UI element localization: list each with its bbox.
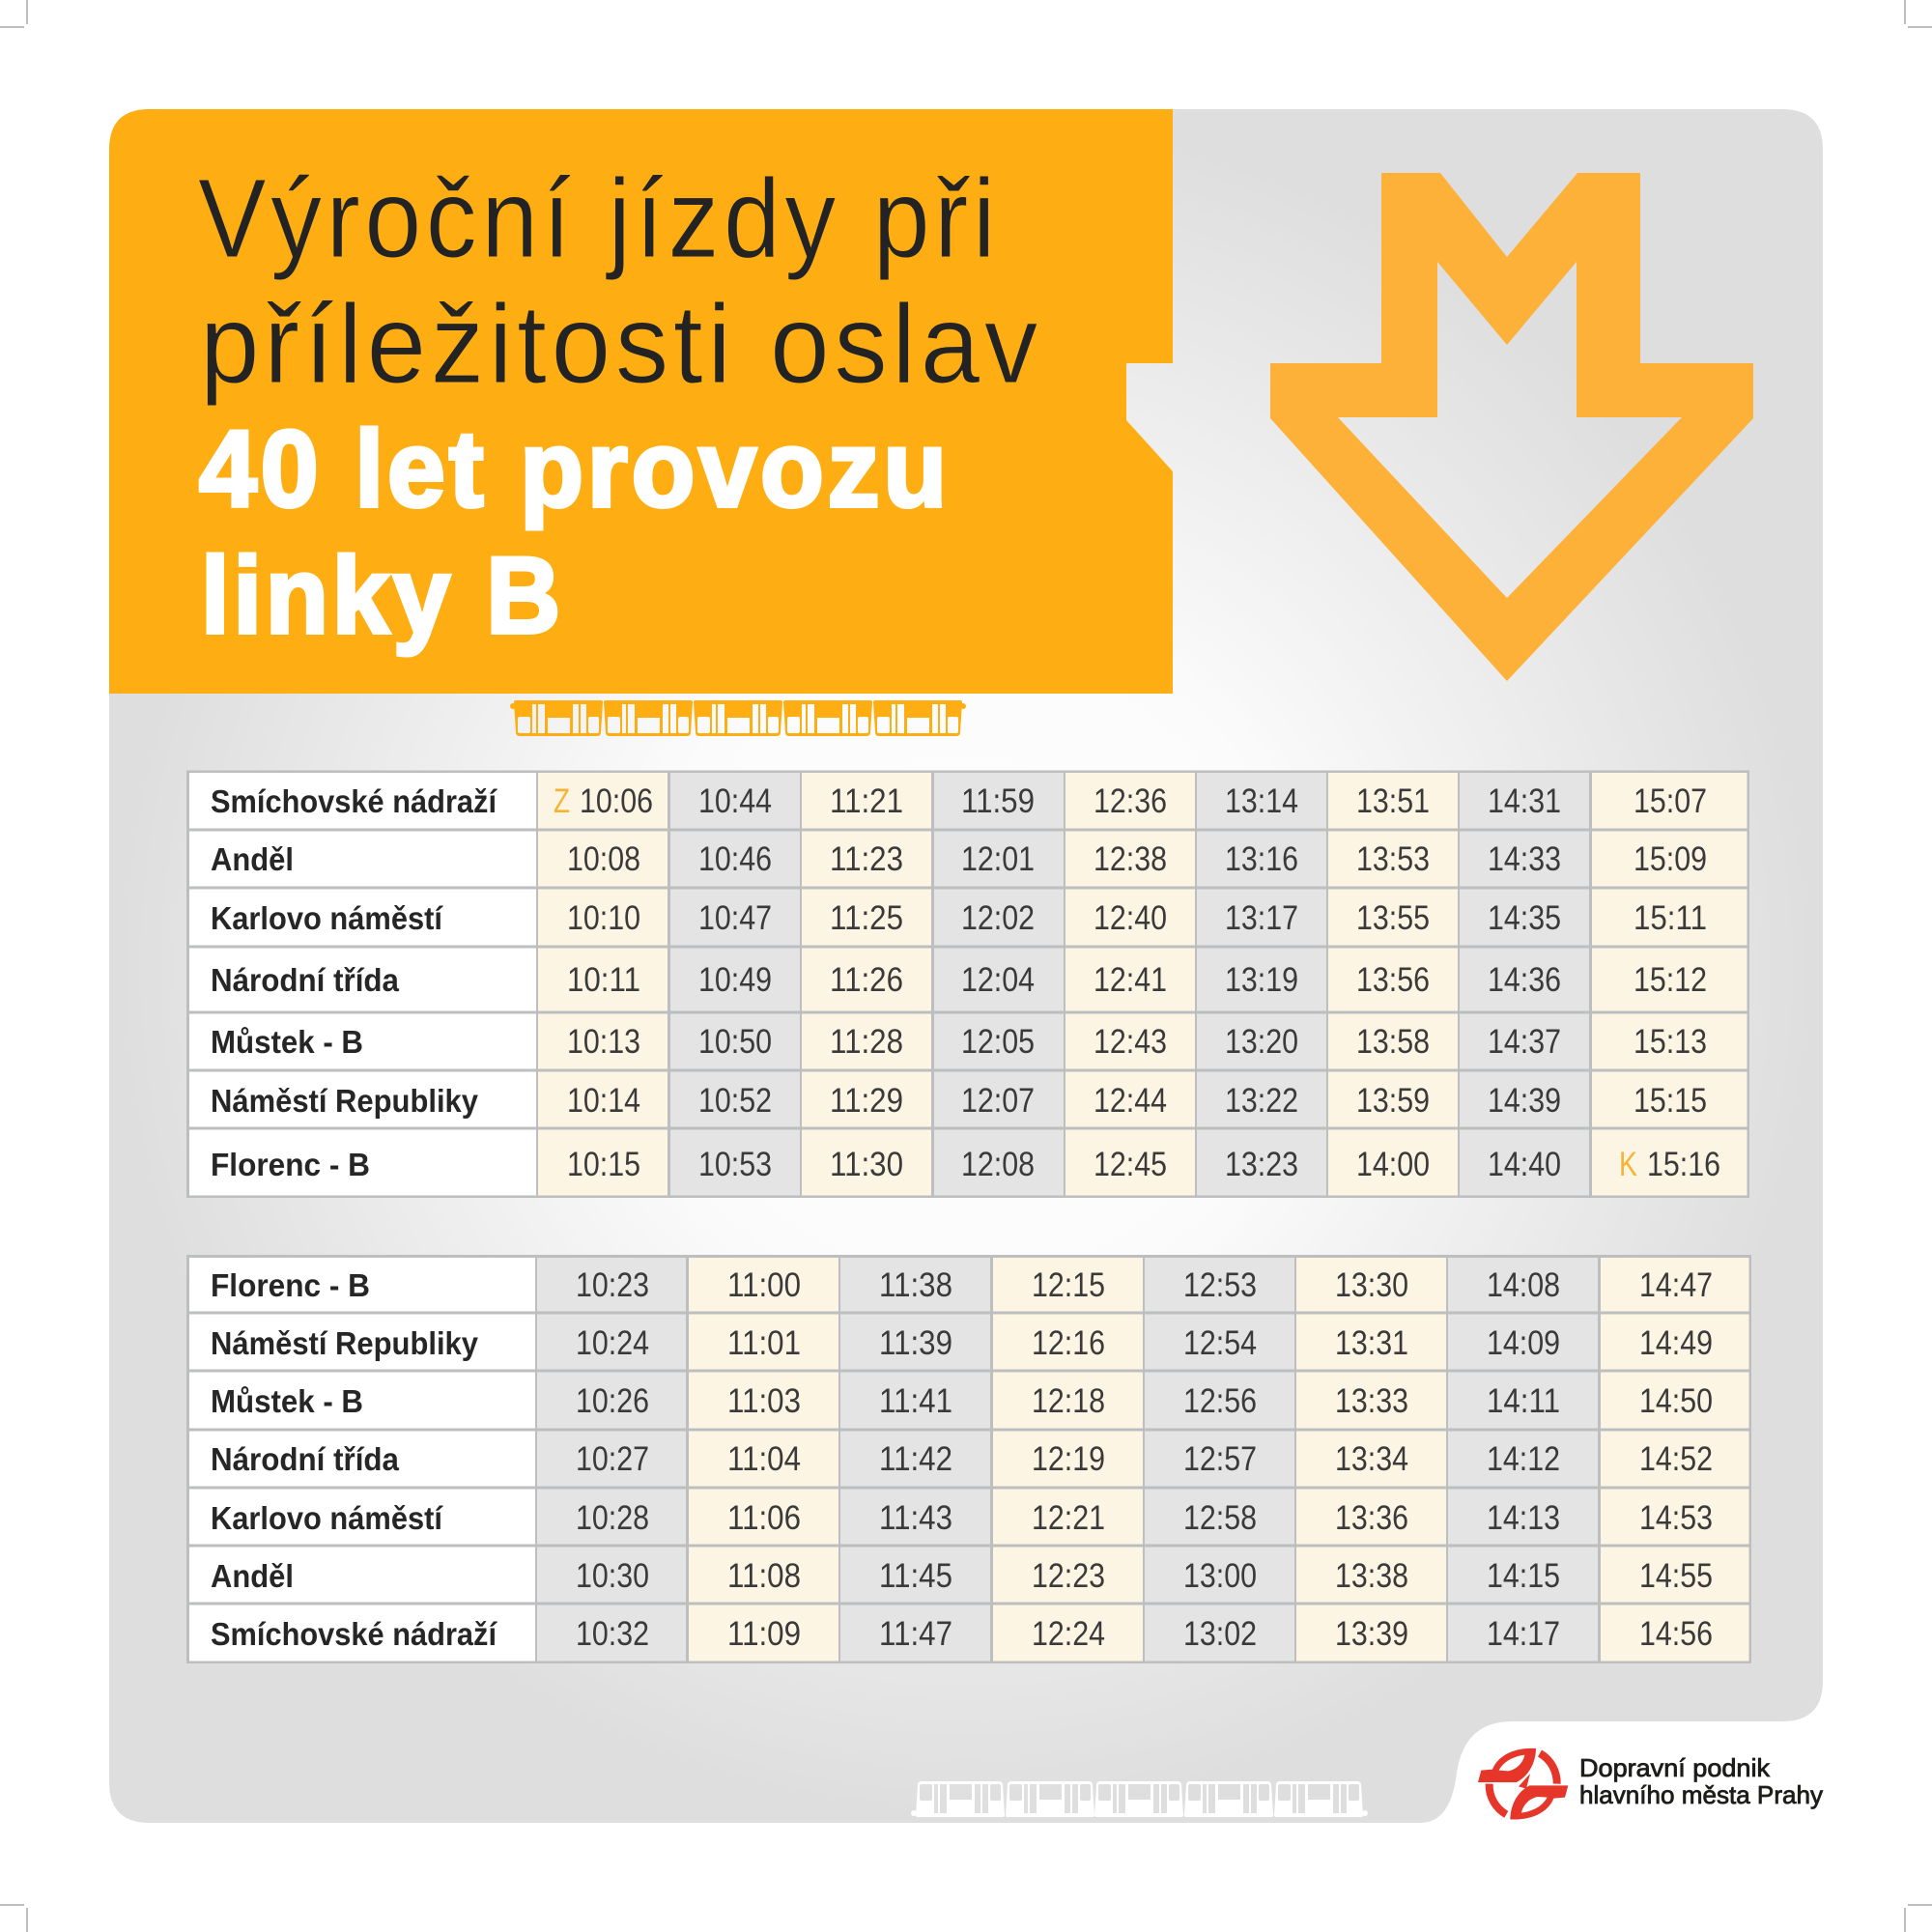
row: Národní třída [211, 961, 1707, 999]
row: Anděl: 11:45 [879, 1557, 952, 1595]
text: DPP company name [1579, 1753, 1823, 1809]
row: Florenc - B: 12:08 [961, 1146, 1035, 1183]
row: Náměstí Republiky [211, 1324, 1713, 1362]
icon: orange train [510, 700, 966, 736]
title: linky B [201, 535, 564, 656]
row: Můstek - B [211, 1382, 1713, 1420]
row: Můstek - B: 12:56 [1183, 1382, 1257, 1420]
row: Anděl [211, 1557, 1713, 1595]
row: Florenc - B: 14:40 [1488, 1146, 1561, 1183]
row: Smíchovské nádraží: 11:21 [830, 782, 903, 820]
row: Náměstí Republiky [211, 1082, 1707, 1120]
title: Výroční jízdy při [198, 156, 1000, 281]
row: Můstek - B: Můstek - B [211, 1383, 363, 1419]
panel: grey background [109, 109, 1823, 1823]
icon: metro M arrow logo [1270, 173, 1753, 681]
row: Florenc - B: 13:30 [1335, 1266, 1408, 1304]
row: Národní třída [211, 1440, 1713, 1478]
row: Můstek - B: 13:33 [1335, 1382, 1408, 1420]
row: Můstek - B: 10:26 [576, 1382, 649, 1420]
row: Karlovo náměstí: 12:40 [1094, 899, 1167, 937]
row: Můstek - B: 12:05 [961, 1023, 1035, 1061]
row: Karlovo náměstí: 15:11 [1634, 899, 1707, 937]
row: Národní třída: 14:52 [1639, 1440, 1713, 1478]
row: Náměstí Republiky: 13:31 [1335, 1324, 1408, 1362]
row: Smíchovské nádraží: 10:06 [580, 782, 653, 820]
row: Národní třída: Národní třída [211, 962, 400, 998]
row: Anděl: 10:30 [576, 1557, 649, 1595]
row: Karlovo náměstí: 14:35 [1488, 899, 1561, 937]
row: Náměstí Republiky: 15:15 [1634, 1082, 1707, 1120]
title: 40 let provozu [199, 409, 951, 529]
row: Karlovo náměstí: 11:06 [727, 1499, 801, 1537]
row: Florenc - B: 11:30 [830, 1146, 903, 1183]
row: Anděl: 13:53 [1356, 840, 1430, 878]
row: Florenc - B: 10:23 [576, 1266, 649, 1304]
row: Národní třída: 11:42 [879, 1440, 952, 1478]
row: Národní třída: 12:57 [1183, 1440, 1257, 1478]
row: Národní třída: 13:34 [1335, 1440, 1408, 1478]
row: Smíchovské nádraží: 13:39 [1335, 1615, 1408, 1653]
table: return timetable [186, 1255, 1751, 1663]
row: Můstek - B: 13:20 [1225, 1023, 1298, 1061]
row: Anděl: 14:15 [1487, 1557, 1560, 1595]
row: Anděl: 15:09 [1634, 840, 1707, 878]
row: Karlovo náměstí: 13:17 [1225, 899, 1298, 937]
row: Florenc - B: 14:47 [1639, 1266, 1713, 1304]
row: Náměstí Republiky: Náměstí Republiky [211, 1325, 479, 1361]
row: Florenc - B: 12:45 [1094, 1146, 1167, 1183]
row: Karlovo náměstí: 14:53 [1639, 1499, 1713, 1537]
row: Můstek - B: 14:11 [1487, 1382, 1560, 1420]
row: Karlovo náměstí: 11:25 [830, 899, 903, 937]
row: Florenc - B: 14:00 [1356, 1146, 1430, 1183]
row: Karlovo náměstí: 10:28 [576, 1499, 649, 1537]
row: Náměstí Republiky: 10:14 [567, 1082, 640, 1120]
row: Smíchovské nádraží: 13:02 [1183, 1615, 1257, 1653]
row: Florenc - B [211, 1266, 1713, 1304]
row: Anděl: Anděl [211, 1558, 294, 1594]
row: Smíchovské nádraží: 14:17 [1487, 1615, 1560, 1653]
row: Můstek - B: Můstek - B [211, 1024, 363, 1060]
row: Smíchovské nádraží [211, 1615, 1713, 1653]
row: Náměstí Republiky: 11:39 [879, 1324, 952, 1362]
row: Karlovo náměstí: 10:10 [567, 899, 640, 937]
row: Náměstí Republiky: 11:29 [830, 1082, 903, 1120]
row: Můstek - B: 11:28 [830, 1023, 903, 1061]
row: Florenc - B: 15:16 [1647, 1146, 1720, 1183]
row: Smíchovské nádraží: Smíchovské nádraží [211, 1616, 498, 1652]
row: Smíchovské nádraží: 14:56 [1639, 1615, 1713, 1653]
row: Smíchovské nádraží: 13:51 [1356, 782, 1430, 820]
row: Můstek - B: 10:50 [698, 1023, 772, 1061]
row: Florenc - B: 11:38 [879, 1266, 952, 1304]
row: Národní třída: 11:04 [727, 1440, 801, 1478]
row: Národní třída: 13:56 [1356, 961, 1430, 999]
row: Smíchovské nádraží: 11:47 [879, 1615, 952, 1653]
row: Anděl: 13:16 [1225, 840, 1298, 878]
row: Anděl: 10:08 [567, 840, 640, 878]
row: Anděl: 12:38 [1094, 840, 1167, 878]
row: Anděl: 13:00 [1183, 1557, 1257, 1595]
row: Náměstí Republiky: 12:07 [961, 1082, 1035, 1120]
row: Smíchovské nádraží [211, 782, 1707, 820]
row: Náměstí Republiky: 14:09 [1487, 1324, 1560, 1362]
row: Smíchovské nádraží: Z [554, 782, 570, 820]
row: Florenc - B: Florenc - B [211, 1147, 370, 1182]
row: Anděl: 14:33 [1488, 840, 1561, 878]
row: Náměstí Republiky: 13:22 [1225, 1082, 1298, 1120]
row: Anděl: 11:23 [830, 840, 903, 878]
row: Karlovo náměstí: 12:21 [1032, 1499, 1105, 1537]
row: Náměstí Republiky: 14:49 [1639, 1324, 1713, 1362]
row: Národní třída: 12:04 [961, 961, 1035, 999]
row: Národní třída: 13:19 [1225, 961, 1298, 999]
row: Anděl: 11:08 [727, 1557, 801, 1595]
row: Karlovo náměstí: 10:47 [698, 899, 772, 937]
row: Náměstí Republiky: 10:24 [576, 1324, 649, 1362]
row: Náměstí Republiky: 10:52 [698, 1082, 772, 1120]
row: Můstek - B [211, 1023, 1707, 1061]
row: Smíchovské nádraží: 13:14 [1225, 782, 1298, 820]
row: Národní třída: 11:26 [830, 961, 903, 999]
row: Karlovo náměstí: Karlovo náměstí [211, 1500, 444, 1536]
row: Náměstí Republiky: 12:54 [1183, 1324, 1257, 1362]
row: Smíchovské nádraží: 11:09 [727, 1615, 801, 1653]
icon: white train [911, 1781, 1368, 1817]
row: Florenc - B: 12:15 [1032, 1266, 1105, 1304]
icon: DPP red logo [1478, 1748, 1568, 1820]
row: Náměstí Republiky: Náměstí Republiky [211, 1083, 479, 1119]
row: Smíchovské nádraží: 12:36 [1094, 782, 1167, 820]
title [198, 156, 1042, 656]
text: DPP company name: Dopravní podnik [1579, 1753, 1771, 1782]
row: Anděl: 13:38 [1335, 1557, 1408, 1595]
text: DPP company name: hlavního města Prahy [1579, 1780, 1823, 1809]
row: Karlovo náměstí: Karlovo náměstí [211, 900, 444, 936]
row: Karlovo náměstí [211, 899, 1707, 937]
row: Národní třída: 10:49 [698, 961, 772, 999]
row: Můstek - B: 10:13 [567, 1023, 640, 1061]
row: Florenc - B: 10:53 [698, 1146, 772, 1183]
row: Můstek - B: 14:50 [1639, 1382, 1713, 1420]
row: Smíchovské nádraží: 10:32 [576, 1615, 649, 1653]
row: Můstek - B: 15:13 [1634, 1023, 1707, 1061]
row: Národní třída: 10:11 [567, 961, 640, 999]
row: Národní třída: 12:19 [1032, 1440, 1105, 1478]
row: Florenc - B: Florenc - B [211, 1267, 370, 1303]
row: Národní třída: 10:27 [576, 1440, 649, 1478]
row: Náměstí Republiky: 14:39 [1488, 1082, 1561, 1120]
row: Smíchovské nádraží: 10:44 [698, 782, 772, 820]
row: Můstek - B: 11:03 [727, 1382, 801, 1420]
row: Anděl: 10:46 [698, 840, 772, 878]
row: Smíchovské nádraží: Smíchovské nádraží [211, 783, 498, 819]
row: Karlovo náměstí: 12:58 [1183, 1499, 1257, 1537]
title: příležitosti oslav [200, 281, 1042, 407]
row: Můstek - B: 11:41 [879, 1382, 952, 1420]
row: Můstek - B: 12:43 [1094, 1023, 1167, 1061]
row: Náměstí Republiky: 12:16 [1032, 1324, 1105, 1362]
row: Florenc - B: 13:23 [1225, 1146, 1298, 1183]
panel: orange header [109, 109, 1173, 694]
row: Smíchovské nádraží: 14:31 [1488, 782, 1561, 820]
row: Florenc - B: 14:08 [1487, 1266, 1560, 1304]
row: Národní třída: 12:41 [1094, 961, 1167, 999]
row: Florenc - B: K [1619, 1146, 1637, 1183]
row: Smíchovské nádraží: 11:59 [961, 782, 1035, 820]
row: Smíchovské nádraží: 12:24 [1032, 1615, 1105, 1653]
row: Národní třída: 14:36 [1488, 961, 1561, 999]
row: Anděl: 14:55 [1639, 1557, 1713, 1595]
row: Anděl: 12:23 [1032, 1557, 1105, 1595]
row: Karlovo náměstí: 13:36 [1335, 1499, 1408, 1537]
row: Florenc - B: 12:53 [1183, 1266, 1257, 1304]
row: Náměstí Republiky: 11:01 [727, 1324, 801, 1362]
row: Anděl [211, 840, 1707, 878]
row: Karlovo náměstí: 11:43 [879, 1499, 952, 1537]
row: Florenc - B: 10:15 [567, 1146, 640, 1183]
row: Karlovo náměstí [211, 1499, 1713, 1537]
table: outbound timetable [186, 771, 1749, 1198]
row: Karlovo náměstí: 12:02 [961, 899, 1035, 937]
row: Můstek - B: 13:58 [1356, 1023, 1430, 1061]
row: Náměstí Republiky: 13:59 [1356, 1082, 1430, 1120]
row: Florenc - B [211, 1146, 1720, 1183]
row: Můstek - B: 12:18 [1032, 1382, 1105, 1420]
row: Anděl: 12:01 [961, 840, 1035, 878]
row: Smíchovské nádraží: 15:07 [1634, 782, 1707, 820]
row: Národní třída: 15:12 [1634, 961, 1707, 999]
row: Karlovo náměstí: 14:13 [1487, 1499, 1560, 1537]
row: Anděl: Anděl [211, 841, 294, 877]
row: Můstek - B: 14:37 [1488, 1023, 1561, 1061]
row: Náměstí Republiky: 12:44 [1094, 1082, 1167, 1120]
row: Florenc - B: 11:00 [727, 1266, 801, 1304]
row: Národní třída: 14:12 [1487, 1440, 1560, 1478]
row: Karlovo náměstí: 13:55 [1356, 899, 1430, 937]
row: Národní třída: Národní třída [211, 1441, 400, 1477]
